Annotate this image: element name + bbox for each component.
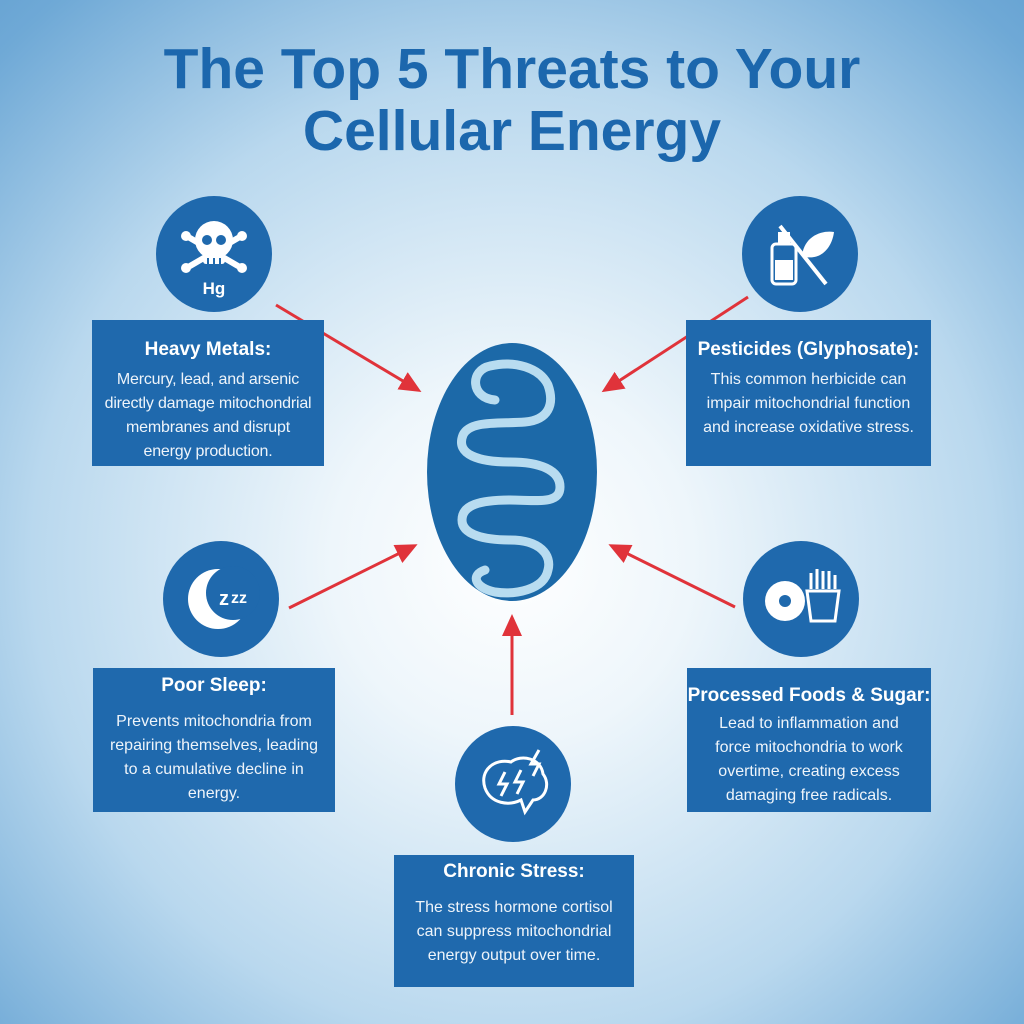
panel: poor sleep: to a cumulative decline in xyxy=(124,761,304,778)
arrow: pesticides xyxy=(605,297,748,390)
icon: food xyxy=(743,541,859,657)
panel: chronic stress: The stress hormone cortisol xyxy=(415,899,613,916)
panel: chronic stress: can suppress mitochondrial xyxy=(417,923,611,940)
panel: processed foods xyxy=(687,668,931,812)
title: The Top 5 Threats to Your xyxy=(164,37,860,101)
panel: chronic stress xyxy=(394,855,634,987)
title xyxy=(164,37,860,163)
panel: poor sleep: Poor Sleep: xyxy=(161,675,267,696)
panel: pesticides: Pesticides (Glyphosate): xyxy=(698,339,919,360)
panel: poor sleep: Prevents mitochondria from xyxy=(116,713,312,730)
panel: processed foods: Processed Foods & Sugar: xyxy=(688,685,930,706)
panel: heavy metals: energy production. xyxy=(144,443,272,460)
icon: sleep xyxy=(163,541,279,657)
panel: poor sleep: energy. xyxy=(188,785,240,802)
panel: processed foods: overtime, creating excess xyxy=(718,763,900,780)
panel: chronic stress: Chronic Stress: xyxy=(443,861,585,882)
icon: sleep: z xyxy=(219,588,229,610)
panel: processed foods: force mitochondria to work xyxy=(715,739,903,756)
panel: pesticides: This common herbicide can xyxy=(711,371,906,388)
arrow: sleep xyxy=(289,546,414,608)
panel: pesticides: and increase oxidative stress. xyxy=(703,419,914,436)
icon: stressed brain xyxy=(455,726,571,842)
arrow: stress xyxy=(510,618,514,715)
panel: heavy metals: membranes and disrupt xyxy=(126,419,290,436)
panel: poor sleep xyxy=(93,668,335,812)
icon: skull Hg xyxy=(156,196,272,312)
panel: processed foods: Lead to inflammation and xyxy=(719,715,899,732)
panel: chronic stress: energy output over time. xyxy=(428,947,600,964)
icon: sleep: zz xyxy=(231,590,247,607)
panel: pesticides xyxy=(686,320,931,466)
panel: poor sleep: repairing themselves, leading xyxy=(110,737,318,754)
panel: heavy metals: Heavy Metals: xyxy=(145,339,271,360)
arrow: heavy metals xyxy=(276,305,418,390)
icon: skull Hg: Hg xyxy=(203,279,225,298)
arrow: food xyxy=(612,546,735,607)
panel: pesticides: impair mitochondrial function xyxy=(707,395,910,412)
panel: heavy metals: directly damage mitochondrial xyxy=(105,395,311,412)
panel: heavy metals xyxy=(92,320,324,466)
title: Cellular Energy xyxy=(303,99,721,163)
panel: processed foods: damaging free radicals. xyxy=(726,787,892,804)
mitochondrion xyxy=(427,343,597,601)
panel: heavy metals: Mercury, lead, and arsenic xyxy=(117,371,299,388)
icon: pesticide xyxy=(742,196,858,312)
